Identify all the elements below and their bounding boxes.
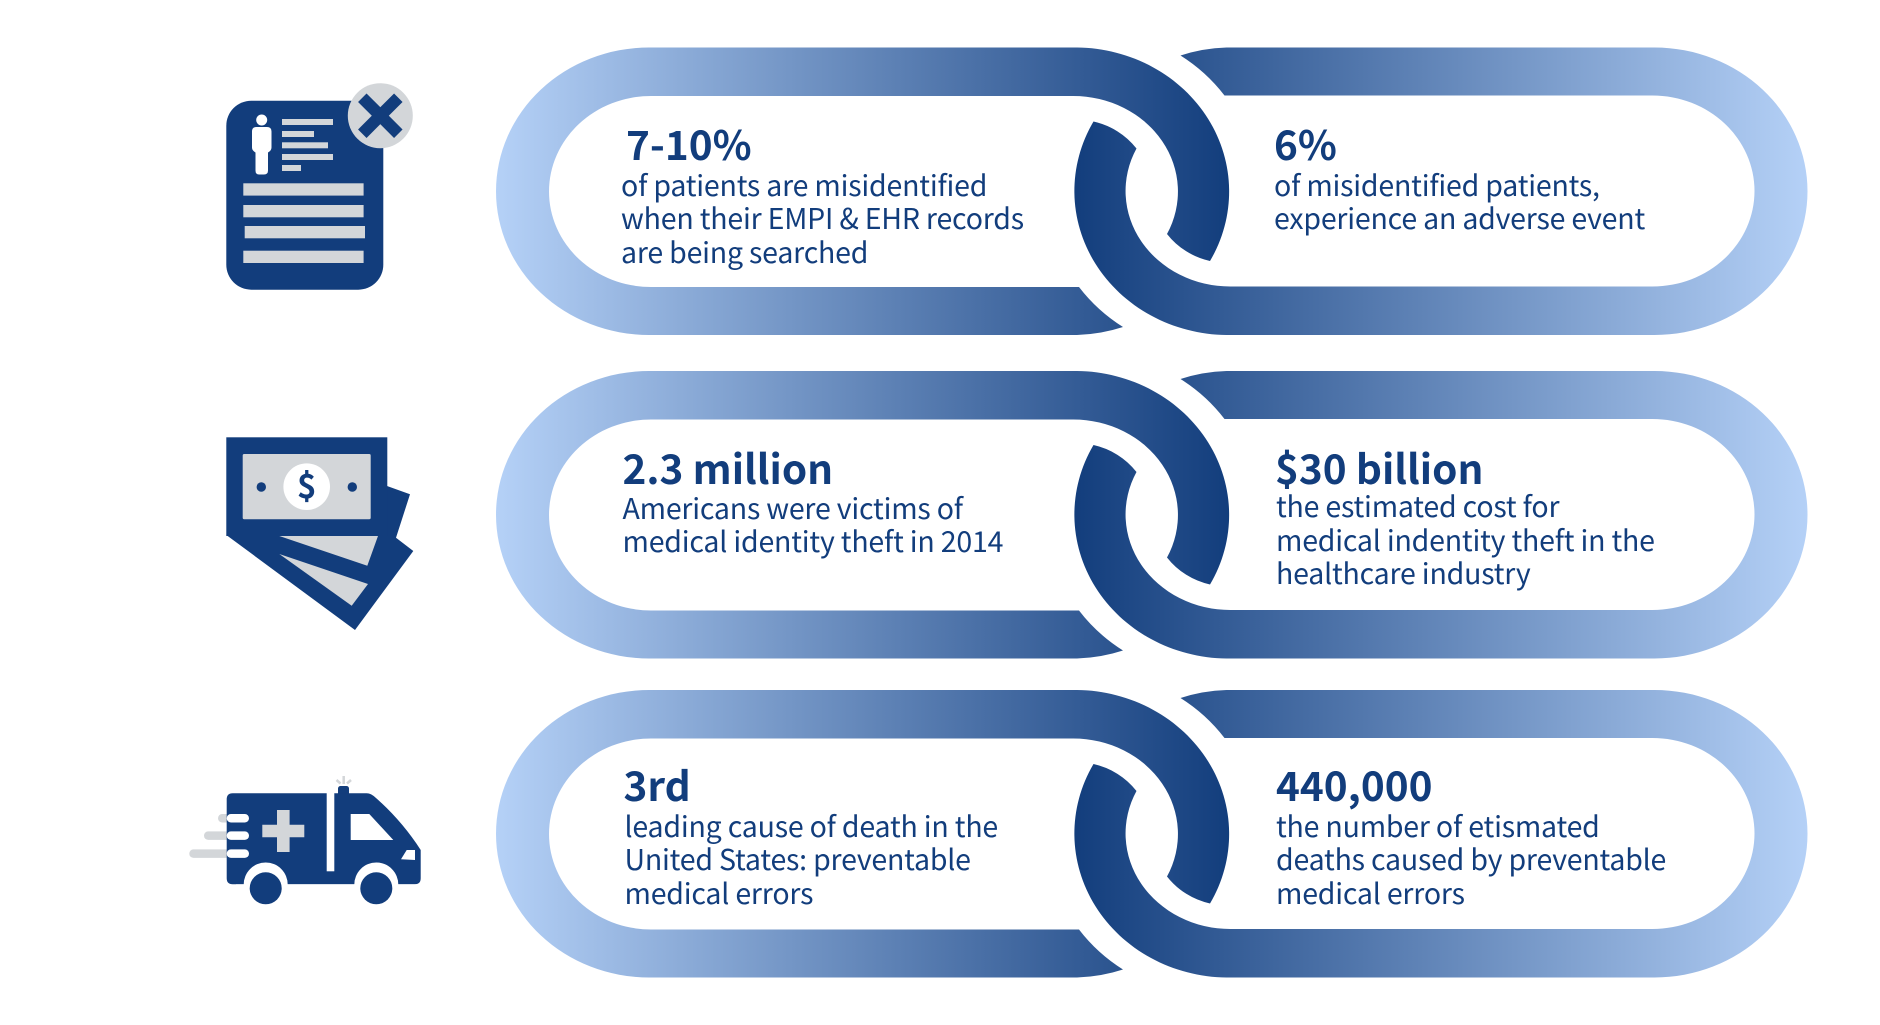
left link 1 xyxy=(496,48,1229,335)
stat: 3rd: United States: preventable xyxy=(624,838,971,879)
stat: 3rd: medical errors xyxy=(624,872,813,913)
stat: $30 billion: $30 billion xyxy=(1275,437,1483,496)
icon: ambulance xyxy=(189,776,426,904)
stat: 2.3 million: 2.3 million xyxy=(622,437,833,496)
icon: stack of money: $ xyxy=(297,460,316,508)
stat: 440,000: 440,000 xyxy=(1276,754,1433,813)
stat: $30 billion: healthcare industry xyxy=(1276,552,1531,593)
stat: 6% xyxy=(1274,113,1645,238)
stat: 7-10%: when their EMPI & EHR records xyxy=(621,197,1024,238)
stat: 440,000: the number of etismated xyxy=(1276,805,1600,846)
stat: 7-10%: of patients are misidentified xyxy=(621,164,987,205)
stat: $30 billion: medical indentity theft in the xyxy=(1276,519,1655,560)
stat: 6%: experience an adverse event xyxy=(1274,197,1645,238)
stat: 3rd: leading cause of death in the xyxy=(624,805,998,846)
right link 2 xyxy=(1074,371,1808,658)
stat: $30 billion: the estimated cost for xyxy=(1276,485,1560,526)
stat: 440,000: deaths caused by preventable xyxy=(1276,838,1666,879)
stat: 6%: of misidentified patients, xyxy=(1274,164,1600,205)
chain row 2 xyxy=(496,371,1808,658)
left link 3 xyxy=(496,690,1229,978)
stat: 7-10% xyxy=(621,113,1024,272)
stat: 7-10%: 7-10% xyxy=(626,113,752,172)
chain row 3 xyxy=(496,690,1808,978)
stat: 2.3 million: medical identity theft in 2014 xyxy=(622,520,1003,561)
stat: 7-10%: are being searched xyxy=(621,231,868,272)
right link 3 xyxy=(1074,690,1808,978)
stat: 2.3 million xyxy=(622,437,1003,561)
chain row 1 xyxy=(496,48,1808,335)
stat: 3rd xyxy=(624,754,998,913)
left link 2 xyxy=(496,371,1229,658)
stat: 440,000 xyxy=(1276,754,1666,913)
stat: 6%: 6% xyxy=(1274,113,1337,172)
icon: patient record with error mark xyxy=(226,83,413,290)
right link 1 xyxy=(1074,48,1808,335)
stat: 2.3 million: Americans were victims of xyxy=(622,487,965,528)
stat: 440,000: medical errors xyxy=(1276,872,1465,913)
stat: $30 billion xyxy=(1275,437,1655,593)
stat: 3rd: 3rd xyxy=(624,754,691,813)
icon: stack of money xyxy=(226,437,413,630)
